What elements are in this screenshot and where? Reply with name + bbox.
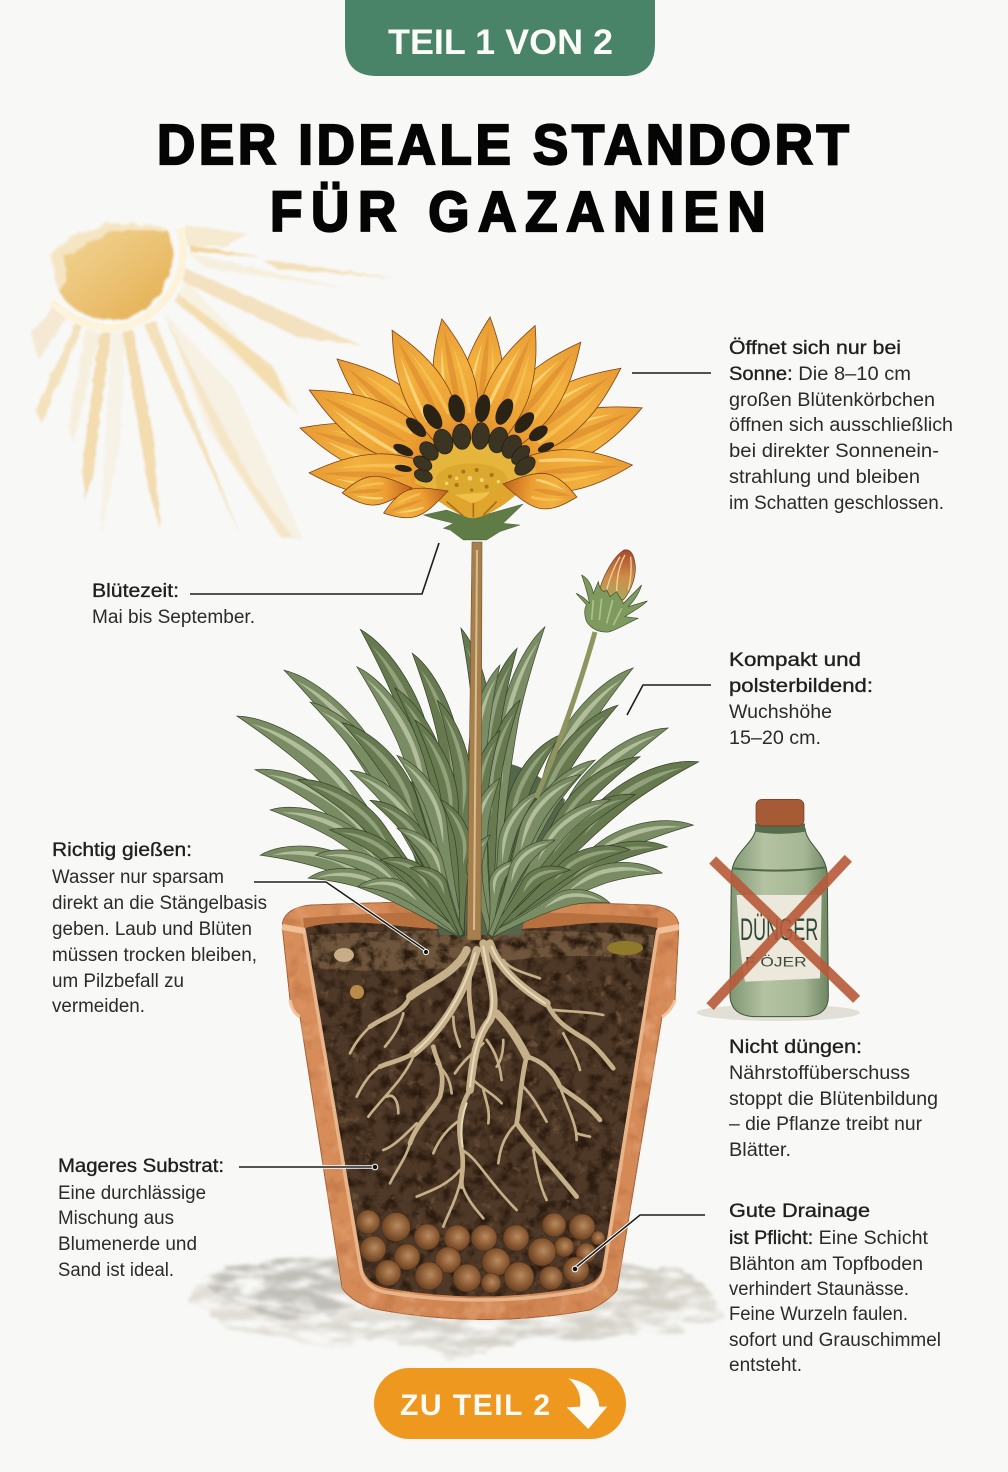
lighter topsoil band: [310, 930, 654, 971]
leader: drainage: [572, 1215, 705, 1272]
text: opens only in sun: großen Blütenkörbchen: [729, 390, 935, 411]
text: lean substrate: Mageres Substrat:: [58, 1156, 224, 1177]
text: drainage: sofort und Grauschimmel: [729, 1330, 941, 1351]
sun ring: [52, 228, 183, 328]
text: lean substrate: [58, 1156, 224, 1281]
text: opens only in sun: öffnen sich ausschließlich: [729, 415, 953, 436]
text: opens only in sun: strahlung und bleiben: [729, 467, 920, 488]
title: FÜR GAZANIEN: [270, 179, 766, 243]
roots: [350, 943, 613, 1227]
gazania foliage: [234, 619, 701, 939]
text: watering: müssen trocken bleiben,: [52, 945, 257, 966]
leader: watering: [254, 882, 429, 955]
text: no fertiliser: – die Pflanze treibt nur: [729, 1114, 923, 1135]
icon: watercolor sun: [32, 223, 397, 540]
bud stem: [536, 632, 595, 798]
sun glow blot: [50, 223, 167, 300]
sun rays: [32, 225, 397, 540]
bottle label: DÜNGER: [740, 912, 818, 947]
text: drainage: [729, 1201, 941, 1376]
text: opens only in sun: bei direkter Sonnenein-: [729, 441, 939, 462]
text: drainage: entsteht.: [729, 1355, 802, 1376]
button: zu Teil 2: ZU TEIL 2: [400, 1389, 550, 1422]
title: [157, 112, 849, 243]
text: drainage: Blähton am Topfboden: [729, 1254, 923, 1275]
text: watering: Wasser nur sparsam: [52, 867, 224, 888]
leader: compact habit: [627, 685, 711, 715]
text: watering: vermeiden.: [52, 996, 145, 1017]
pot shell: [282, 902, 679, 1320]
text: drainage: verhindert Staunässe.: [729, 1279, 909, 1300]
text: watering: um Pilzbefall zu: [52, 971, 184, 992]
text: bloom time: [92, 581, 255, 628]
bottle label: F ÖJER: [745, 953, 807, 970]
text: compact habit: 15–20 cm.: [729, 728, 821, 749]
text: bloom time: Mai bis September.: [92, 607, 255, 628]
text: opens only in sun: Sonne: Die 8–10 cm: [729, 364, 911, 385]
text: no fertiliser: stoppt die Blütenbildung: [729, 1089, 938, 1110]
pebbles: [334, 948, 354, 962]
text: opens only in sun: Öffnet sich nur bei: [729, 338, 901, 359]
text: no fertiliser: [729, 1037, 938, 1161]
text: drainage: Gute Drainage: [729, 1201, 870, 1222]
text: compact habit: polsterbildend:: [729, 676, 873, 697]
no-fertiliser bottle: [697, 799, 860, 1021]
text: compact habit: Wuchshöhe: [729, 702, 832, 723]
pot inner back wall: [303, 912, 658, 935]
text: bloom time: Blütezeit:: [92, 581, 179, 602]
bud petals: [597, 550, 635, 600]
bottle label: [737, 895, 822, 982]
bud calyx: [576, 575, 647, 632]
centre details: [392, 393, 556, 518]
button: zu Teil 2: [374, 1368, 626, 1439]
leader lines: [190, 373, 711, 1272]
text: watering: geben. Laub und Blüten: [52, 919, 252, 940]
red cross: [710, 858, 857, 1007]
text: lean substrate: Sand ist ideal.: [58, 1260, 174, 1281]
text: opens only in sun: im Schatten geschlossen.: [729, 493, 944, 514]
ground shadow under pot: [188, 1248, 712, 1348]
clay balls: [356, 1210, 605, 1293]
text: lean substrate: Blumenerde und: [58, 1234, 197, 1255]
inner wall highlights: [304, 930, 658, 1300]
soil: [305, 922, 657, 1296]
leader: substrate: [239, 1164, 378, 1170]
leader: bloom time: [190, 543, 439, 594]
title: DER IDEALE STANDORT: [157, 112, 849, 176]
bottle shadow: [697, 1004, 860, 1021]
text: watering: Richtig gießen:: [52, 840, 192, 861]
front petals: [341, 467, 580, 526]
dark foliage mass: [395, 759, 565, 935]
gazania flower head: [294, 315, 651, 540]
text: watering: direkt an die Stängelbasis: [52, 893, 267, 914]
header tab: Teil 1 von 2: TEIL 1 VON 2: [388, 23, 613, 62]
text: no fertiliser: Blätter.: [729, 1140, 791, 1161]
text: lean substrate: Mischung aus: [58, 1208, 174, 1229]
text: compact habit: Kompakt und: [729, 650, 861, 671]
text: watering: [52, 840, 267, 1017]
flower bud: [576, 550, 647, 632]
text: compact habit: [729, 650, 873, 749]
bottle body: [730, 828, 828, 1017]
text: lean substrate: Eine durchlässige: [58, 1183, 206, 1204]
terracotta pot cut-away: [282, 902, 679, 1320]
text: no fertiliser: Nährstoffüberschuss: [729, 1063, 910, 1084]
leader: flower: [632, 372, 711, 374]
text: drainage: ist Pflicht: Eine Schicht: [729, 1228, 929, 1249]
calyx: [423, 504, 523, 540]
text: drainage: Feine Wurzeln faulen.: [729, 1304, 908, 1325]
text: no fertiliser: Nicht düngen:: [729, 1037, 862, 1058]
header tab: Teil 1 von 2: [345, 0, 655, 76]
text: opens only in sun: [729, 338, 953, 514]
sun disc: [60, 230, 173, 320]
main flower stem: [467, 542, 482, 940]
petals: [294, 315, 651, 500]
icon: curved down arrow: [567, 1378, 607, 1429]
bottle cap: [756, 799, 804, 826]
